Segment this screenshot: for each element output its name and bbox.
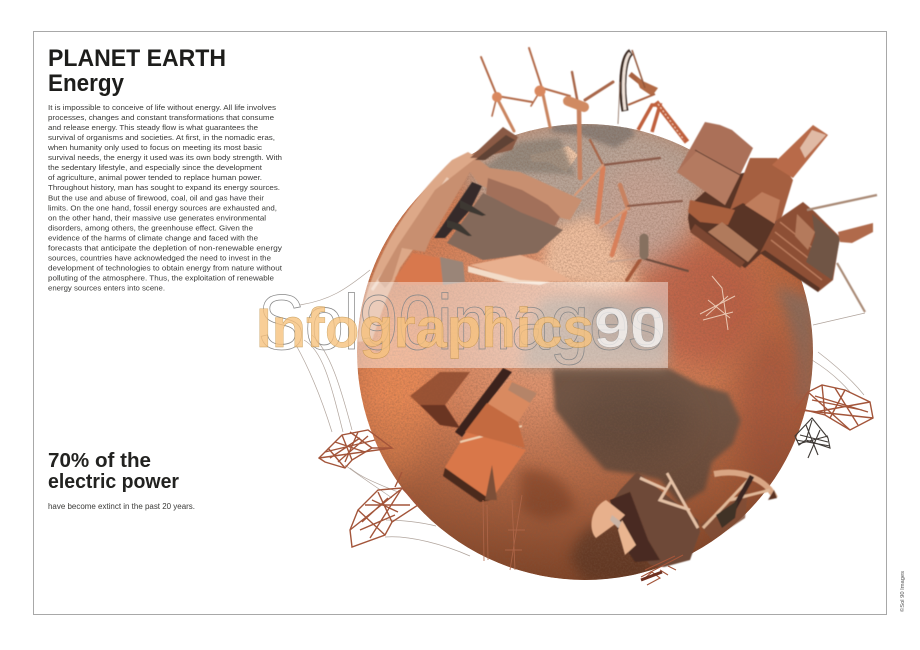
frame	[640, 473, 698, 528]
intro text block: and release energy. This steady flow is what guarantees the	[48, 123, 258, 132]
upper deck	[677, 122, 753, 205]
reservoir corner block	[470, 127, 518, 158]
disc counterweight	[591, 500, 625, 538]
intro text block: sources, countries have acknowledged the need to invest in the	[48, 254, 271, 262]
watermark filled text: Infographics	[256, 296, 594, 359]
dam front block	[395, 253, 445, 285]
lower dark land	[570, 520, 660, 582]
intro text block: survival of organisms and societies. At first, in the nomadic eras,	[48, 133, 275, 142]
intro text block: the sedentary lifestyle, and especially since the development	[48, 163, 263, 172]
watermark panel	[357, 282, 668, 368]
turbine 4	[575, 140, 660, 222]
lattice boom	[656, 102, 687, 142]
gear block	[610, 492, 660, 562]
transmission tower bottom	[641, 555, 683, 585]
intro text block: forecasts that anticipate the depletion of non-renewable energy	[48, 244, 282, 252]
stacked decks	[760, 202, 840, 292]
intro text block: disorders, among others, the greenhouse effect. Given the	[48, 224, 253, 232]
hydroelectric dam	[358, 127, 582, 342]
intro text block: of agriculture, animal power tended to replace human power.	[48, 173, 262, 182]
derrick tower	[772, 125, 828, 178]
left bright band	[357, 300, 433, 480]
intro text block: energy sources enters into scene.	[48, 284, 165, 292]
beam	[703, 476, 770, 528]
right rim	[775, 285, 815, 400]
transmission tower lower left	[350, 472, 418, 547]
derrick frame	[638, 105, 660, 132]
intro text block: It is impossible to conceive of life without energy. All life involves	[48, 103, 276, 112]
turbine 6	[608, 238, 688, 280]
title	[48, 45, 226, 97]
base slab	[606, 472, 700, 567]
industrial complex lower left	[410, 368, 537, 502]
pumpjack bottom right	[606, 472, 777, 567]
mid block	[730, 158, 793, 223]
watermark filled text: 90	[594, 296, 666, 359]
turbines gallery shadow	[434, 182, 482, 238]
red haze	[638, 245, 762, 365]
reservoir floor	[447, 193, 563, 260]
pumpjack bottom left	[591, 492, 660, 562]
power line wires	[296, 270, 865, 556]
watermark outline text: Sol90images	[258, 278, 663, 366]
oil rig 1	[677, 122, 828, 268]
pale continent centre	[540, 215, 640, 290]
bottom shading	[367, 417, 798, 580]
intro text block: processes, changes and constant transformations that consume	[48, 113, 274, 122]
statistic heading: 70% of the	[48, 449, 151, 472]
statistic caption: have become extinct in the past 20 years.	[48, 502, 195, 511]
globe base	[357, 124, 813, 580]
transmission tower dark	[795, 418, 830, 458]
dark divider	[455, 368, 512, 437]
intro text block: But the use and abuse of firewood, coal, oil and gas have their	[48, 194, 264, 202]
turbine 3	[568, 72, 613, 178]
transmission tower right	[794, 385, 873, 430]
globe	[357, 115, 815, 582]
pale sand patch	[470, 255, 570, 282]
oil rig 2	[760, 195, 877, 312]
wind turbine group	[481, 48, 688, 280]
copyright note: ©Sol 90 Images	[899, 571, 906, 612]
intro text block: limits. On the one hand, fossil energy sources are exhausted and,	[48, 204, 277, 212]
small derrick	[838, 223, 873, 243]
pumpjack top	[618, 50, 687, 142]
surface grain	[357, 124, 813, 580]
statistic heading: electric power	[48, 470, 179, 493]
intro text block: evidence of the harms of climate change and faced with the	[48, 234, 258, 242]
horse head	[623, 52, 631, 111]
dam wall	[378, 158, 582, 288]
gray continent top	[550, 124, 635, 148]
intro text block: Throughout history, man has sought to expand its energy sources.	[48, 183, 280, 192]
lower deck	[445, 430, 526, 500]
title: PLANET EARTH	[48, 45, 226, 72]
lower substructure	[688, 170, 780, 268]
pale land over central region	[520, 296, 668, 368]
transmission tower left	[319, 430, 392, 468]
upper block	[487, 380, 537, 422]
support leg	[837, 263, 865, 312]
upper surface tint	[457, 124, 705, 229]
title: Energy	[48, 70, 124, 97]
intro text block: on the other hand, their massive use generates environmental	[48, 214, 266, 222]
turbines	[460, 200, 486, 216]
dam outer rim	[358, 152, 478, 342]
pale continent north	[530, 146, 578, 172]
intro text block: development of technologies to obtain energy from nature without	[48, 264, 283, 272]
transmission tower centre	[700, 276, 735, 330]
intro text block: when humanity only used to focus on meeting its most basic	[47, 143, 262, 152]
crane boom	[807, 195, 877, 210]
intro text block	[47, 103, 283, 292]
intro text block: polluting of the atmosphere. Thus, the exploitation of renewable	[48, 274, 274, 282]
statistic heading	[48, 449, 179, 493]
turbine 5	[600, 185, 682, 255]
turbine 2	[529, 48, 570, 127]
transmission towers on lower globe	[483, 495, 525, 570]
horse head arc	[714, 473, 775, 498]
turbine 1	[481, 57, 532, 131]
central dark continent	[552, 368, 741, 505]
walking beam	[630, 74, 650, 90]
intro text block: survival needs, the energy it used was its own body strength. With	[48, 153, 282, 162]
